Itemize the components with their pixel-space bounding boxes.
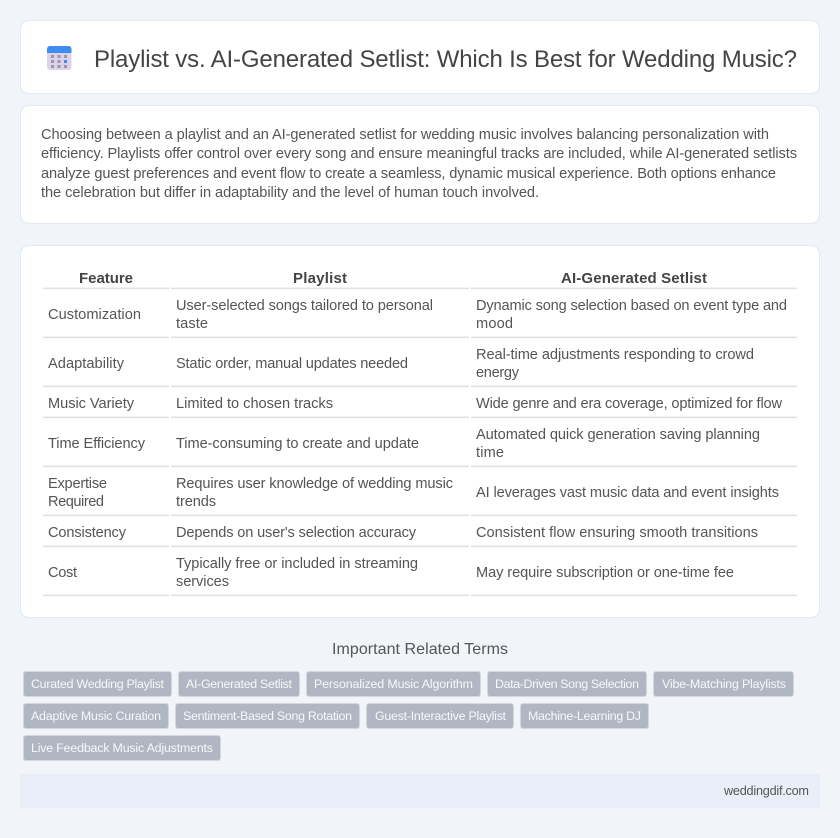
row: time efficiency xyxy=(48,427,760,461)
intro text xyxy=(41,127,797,201)
tag: Guest-Interactive Playlist xyxy=(375,709,507,723)
tag xyxy=(520,704,648,728)
row: customization: User-selected songs tailored to personal xyxy=(176,298,433,314)
row: cost: Typically free or included in streaming xyxy=(176,556,418,572)
tag: Data-Driven Song Selection xyxy=(495,677,639,691)
row: cost: services xyxy=(176,574,229,590)
row: consistency: Depends on user's selection accuracy xyxy=(176,525,417,541)
tag: Personalized Music Algorithm xyxy=(314,677,473,691)
row: expertise required: trends xyxy=(176,494,216,510)
row: cost xyxy=(48,556,734,590)
row: customization: mood xyxy=(476,316,513,332)
row: expertise required: AI leverages vast music data and event insights xyxy=(476,485,779,501)
table header row: Feature xyxy=(79,270,133,287)
row: expertise required: Required xyxy=(48,494,104,510)
tag xyxy=(176,704,360,728)
row: time efficiency: Time Efficiency xyxy=(48,436,146,452)
table header row: AI-Generated Setlist xyxy=(561,270,707,287)
row: adaptability: energy xyxy=(476,365,520,381)
row: music variety xyxy=(48,396,782,412)
tag xyxy=(24,736,220,760)
tag: Sentiment-Based Song Rotation xyxy=(183,709,352,723)
table header row: Playlist xyxy=(293,270,347,287)
row: music variety: Limited to chosen tracks xyxy=(176,396,333,412)
row: adaptability: Static order, manual updates needed xyxy=(176,356,408,372)
row: customization xyxy=(48,298,787,332)
row: adaptability: Real-time adjustments responding to crowd xyxy=(476,347,754,363)
tag xyxy=(178,672,300,696)
tag xyxy=(306,672,480,696)
row: time efficiency: Automated quick generation saving planning xyxy=(476,427,760,443)
panel: title header xyxy=(20,20,820,94)
panel: comparison table xyxy=(20,246,820,618)
intro text: analyze guest preferences and event flow to create a seamless, dynamic musical experience. Both options enhance xyxy=(41,166,776,182)
tag: AI-Generated Setlist xyxy=(186,677,293,691)
table header row xyxy=(79,270,707,287)
row: consistency xyxy=(48,525,758,541)
row: cost: Cost xyxy=(48,565,77,581)
tag xyxy=(24,704,168,728)
row: cost: May require subscription or one-time fee xyxy=(476,565,734,581)
intro text: the celebration but differ in adaptability and the level of human touch involved. xyxy=(41,185,539,201)
tag group: related terms xyxy=(24,672,794,760)
row: music variety: Wide genre and era coverage, optimized for flow xyxy=(476,396,782,412)
row: adaptability xyxy=(48,347,754,381)
row: customization: Customization xyxy=(48,307,141,323)
tag: Live Feedback Music Adjustments xyxy=(31,741,213,755)
tag xyxy=(24,672,172,696)
row: expertise required: Requires user knowledge of wedding music xyxy=(176,476,453,492)
tag xyxy=(654,672,794,696)
tag: Adaptive Music Curation xyxy=(31,709,161,723)
row: time efficiency: time xyxy=(476,445,504,461)
tag xyxy=(366,704,514,728)
footer: weddingdif.com xyxy=(723,784,809,798)
tag: Vibe-Matching Playlists xyxy=(662,677,786,691)
tag xyxy=(488,672,646,696)
row: time efficiency: Time-consuming to create and update xyxy=(176,436,419,452)
row: expertise required xyxy=(48,476,779,510)
row: expertise required: Expertise xyxy=(48,476,107,492)
intro text: Choosing between a playlist and an AI-generated setlist for wedding music involves balancing personalization with xyxy=(41,127,769,143)
row: consistency: Consistent flow ensuring smooth transitions xyxy=(476,525,758,541)
row: consistency: Consistency xyxy=(48,525,127,541)
heading: important related terms: Important Related Terms xyxy=(332,641,508,658)
title: Playlist vs. AI-Generated Setlist: Which Is Best for Wedding Music? xyxy=(94,46,797,73)
tag: Machine-Learning DJ xyxy=(528,709,641,723)
row: customization: Dynamic song selection based on event type and xyxy=(476,298,787,314)
intro text: efficiency. Playlists offer control over every song and ensure meaningful tracks are included, while AI-generated setlists xyxy=(41,146,797,162)
row: music variety: Music Variety xyxy=(48,396,135,412)
row: customization: taste xyxy=(176,316,208,332)
footer xyxy=(20,774,820,808)
icon: calendar xyxy=(47,46,72,70)
row: adaptability: Adaptability xyxy=(48,356,125,372)
panel: introduction xyxy=(20,106,820,224)
tag: Curated Wedding Playlist xyxy=(31,677,165,691)
